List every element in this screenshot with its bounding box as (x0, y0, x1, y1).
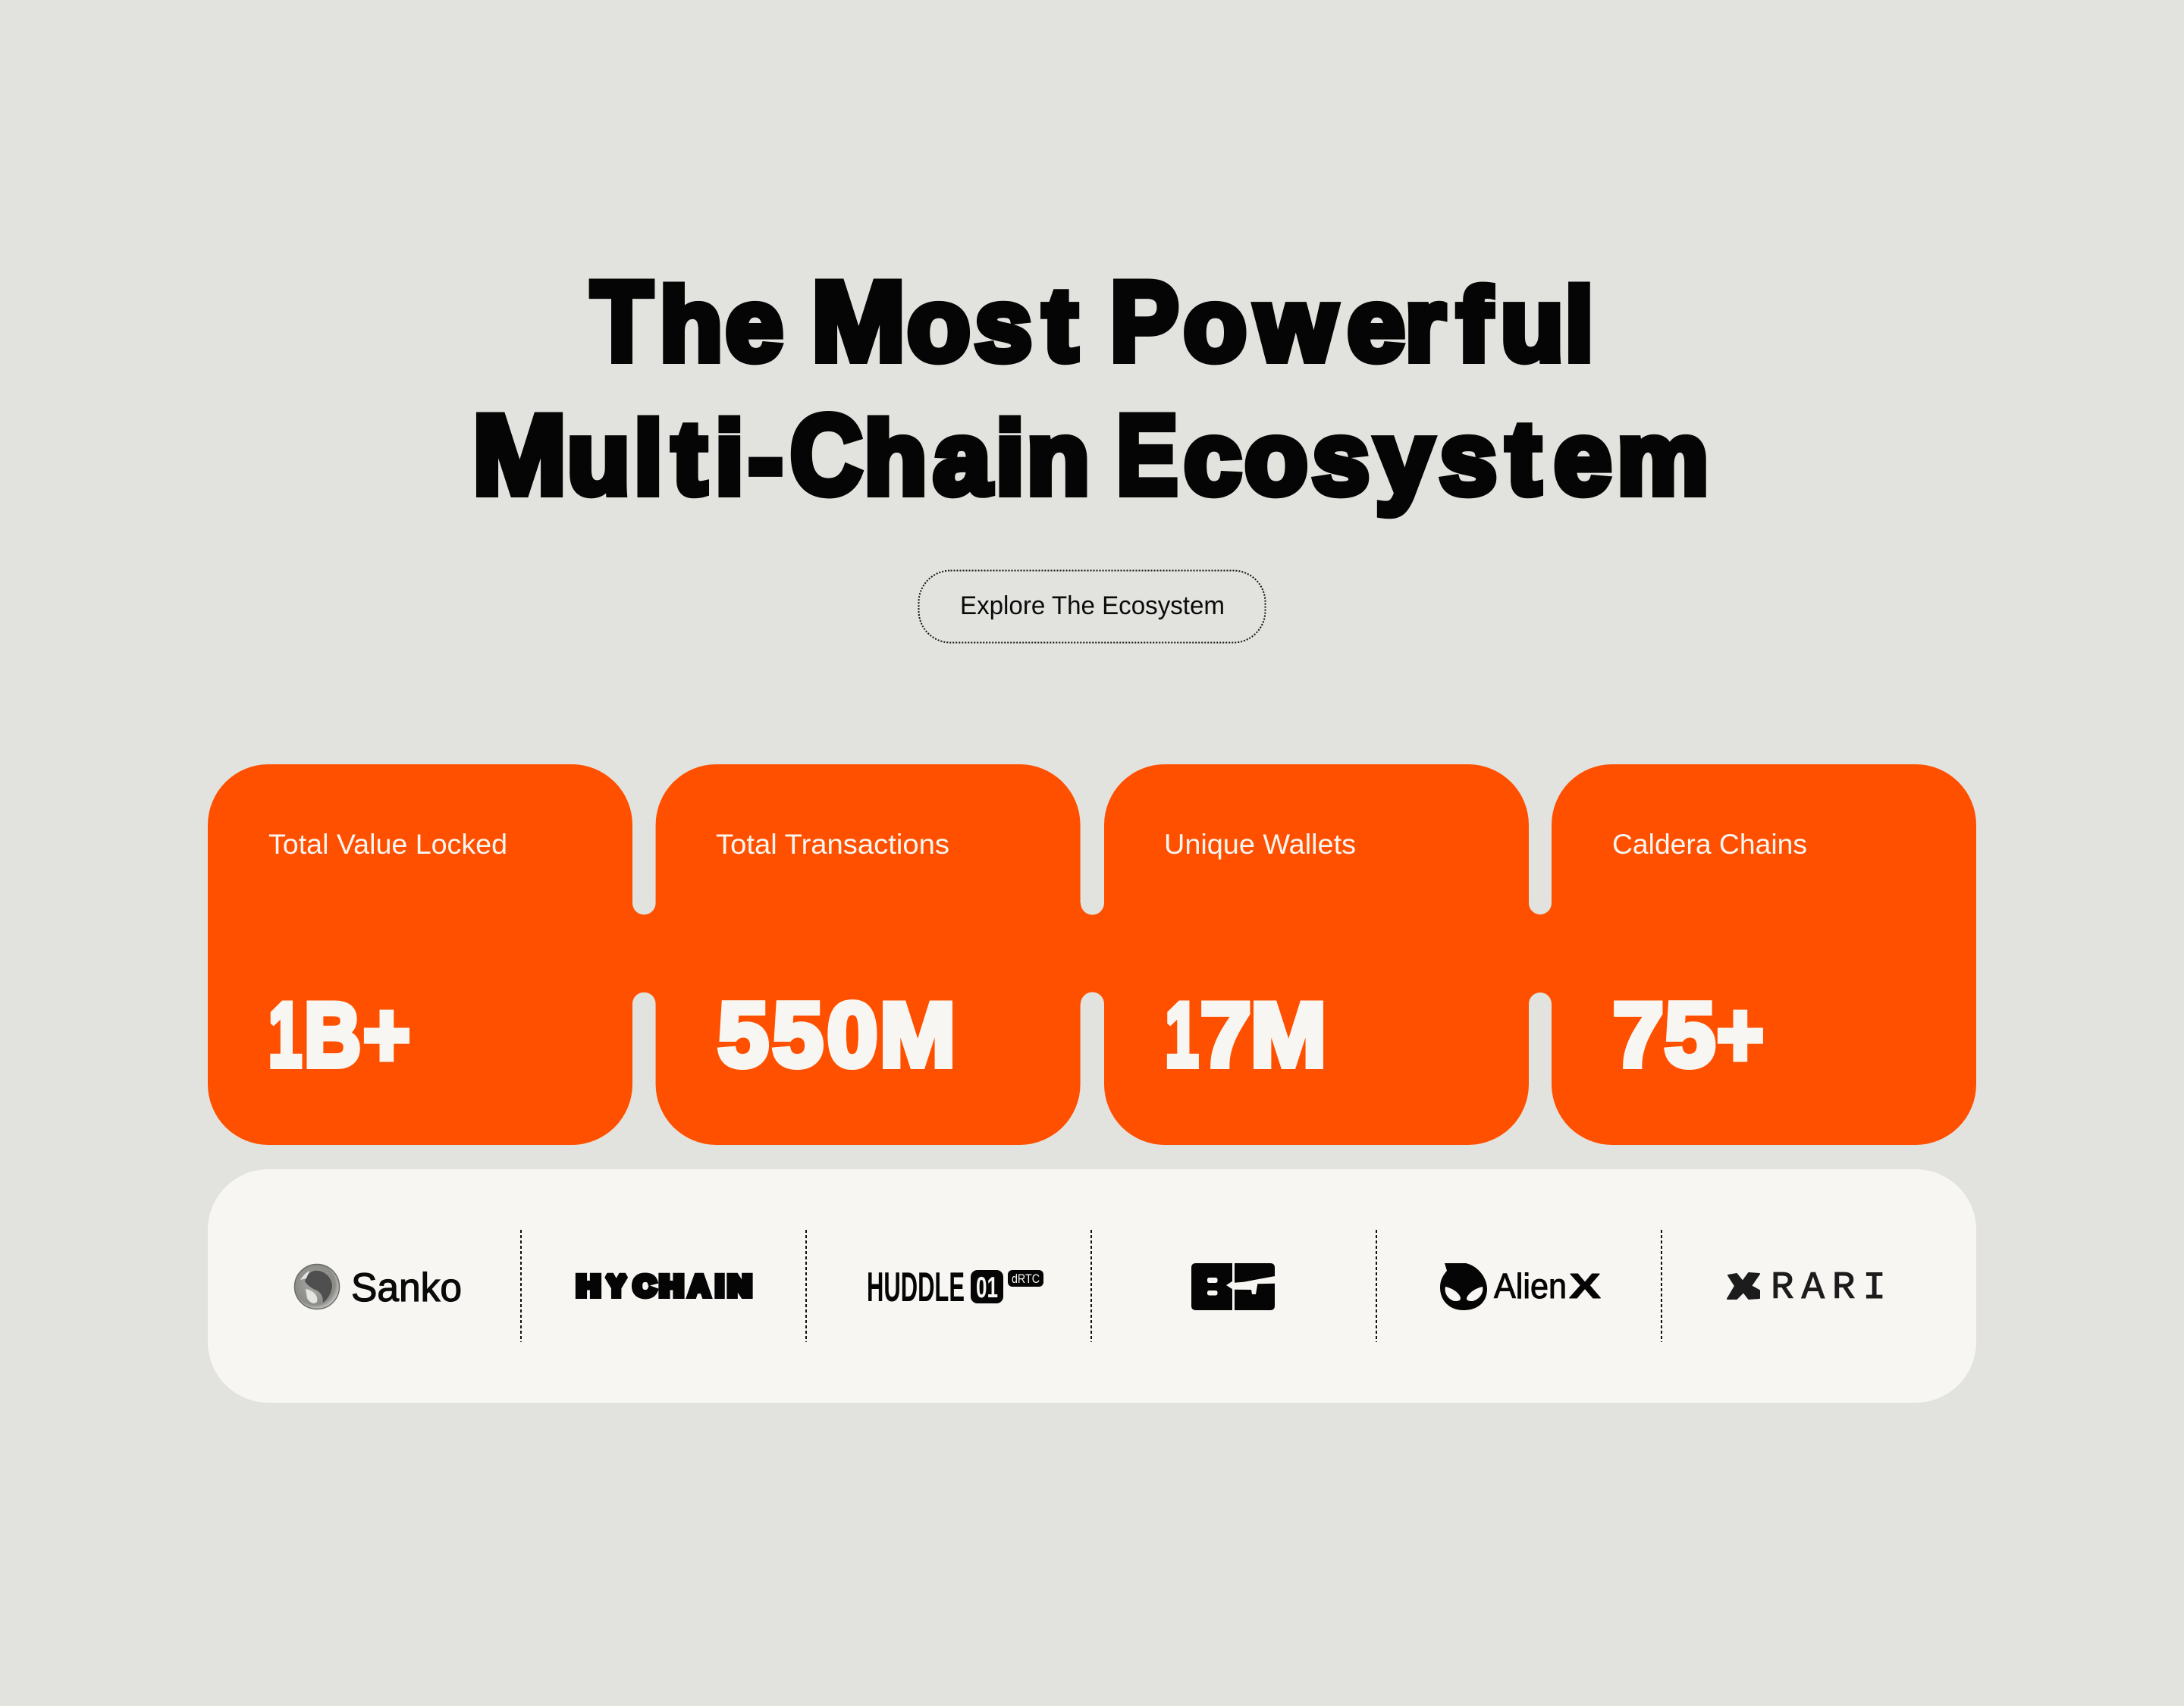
button: explore the ecosystem: Explore The Ecosystem (960, 591, 1225, 620)
panel: partner logos (208, 1169, 1976, 1403)
logo: hychain: N (728, 1271, 752, 1303)
logo: hychain: C (634, 1271, 655, 1303)
title: ost (907, 267, 1078, 382)
logo: sanko: Sanko (351, 1265, 462, 1310)
logo: hychain: H (576, 1271, 601, 1303)
card: unique wallets: 7M (1200, 984, 1326, 1086)
card: caldera chains: + (1717, 984, 1764, 1086)
connector: cards 1 and 2 (632, 903, 657, 1004)
connector: cards 3 and 4 (1528, 903, 1552, 1004)
title: he (660, 267, 783, 382)
logo: rari: RARI (1771, 1267, 1886, 1310)
card: total transactions: Total Transactions (716, 829, 949, 860)
logo: b3: B3 (1197, 1266, 1265, 1309)
card: unique wallets: 1 (1165, 984, 1198, 1086)
title: ulti- (567, 400, 783, 516)
title: cosystem (1184, 400, 1709, 516)
card: caldera chains: Caldera Chains (1612, 829, 1807, 860)
title: C (790, 391, 862, 518)
logo: alienx (1440, 1263, 1601, 1310)
logo: hychain: Y (607, 1271, 626, 1303)
card: unique wallets (1104, 764, 1529, 1145)
title (472, 258, 1709, 518)
title: M (472, 391, 566, 518)
logo: alienx: X (1569, 1266, 1601, 1306)
logo: alienx: Alien (1494, 1266, 1567, 1306)
logo: hychain: I (716, 1271, 723, 1303)
logo: huddle01: dRTC (1012, 1272, 1040, 1286)
title: E (1116, 391, 1178, 518)
card: total value locked: + (363, 984, 410, 1086)
logo: hychain: A (689, 1271, 709, 1303)
card: caldera chains: 75 (1613, 984, 1715, 1086)
logo: sanko (294, 1265, 462, 1310)
logo: hychain (576, 1271, 752, 1303)
title: hain (864, 400, 1090, 516)
card: total value locked (208, 764, 632, 1145)
card: unique wallets: Unique Wallets (1164, 829, 1356, 860)
logo: huddle01: HUDDLE (867, 1263, 965, 1310)
connector: cards 2 and 3 (1080, 903, 1105, 1004)
title: T (592, 258, 652, 384)
card: total value locked: 1 (268, 984, 302, 1086)
logo: huddle01: 01 (976, 1272, 998, 1304)
card: total value locked: B (304, 984, 361, 1086)
card: total transactions: 550M (718, 984, 956, 1086)
card: total value locked: Total Value Locked (268, 829, 507, 860)
title: owerful (1184, 267, 1593, 382)
title: M (811, 258, 905, 384)
card: total transactions (656, 764, 1081, 1145)
button: explore the ecosystem (919, 570, 1265, 643)
logo: hychain: H (660, 1271, 683, 1303)
title: P (1110, 258, 1178, 384)
card: caldera chains (1552, 764, 1976, 1145)
panel: stat cards (208, 764, 1976, 1145)
